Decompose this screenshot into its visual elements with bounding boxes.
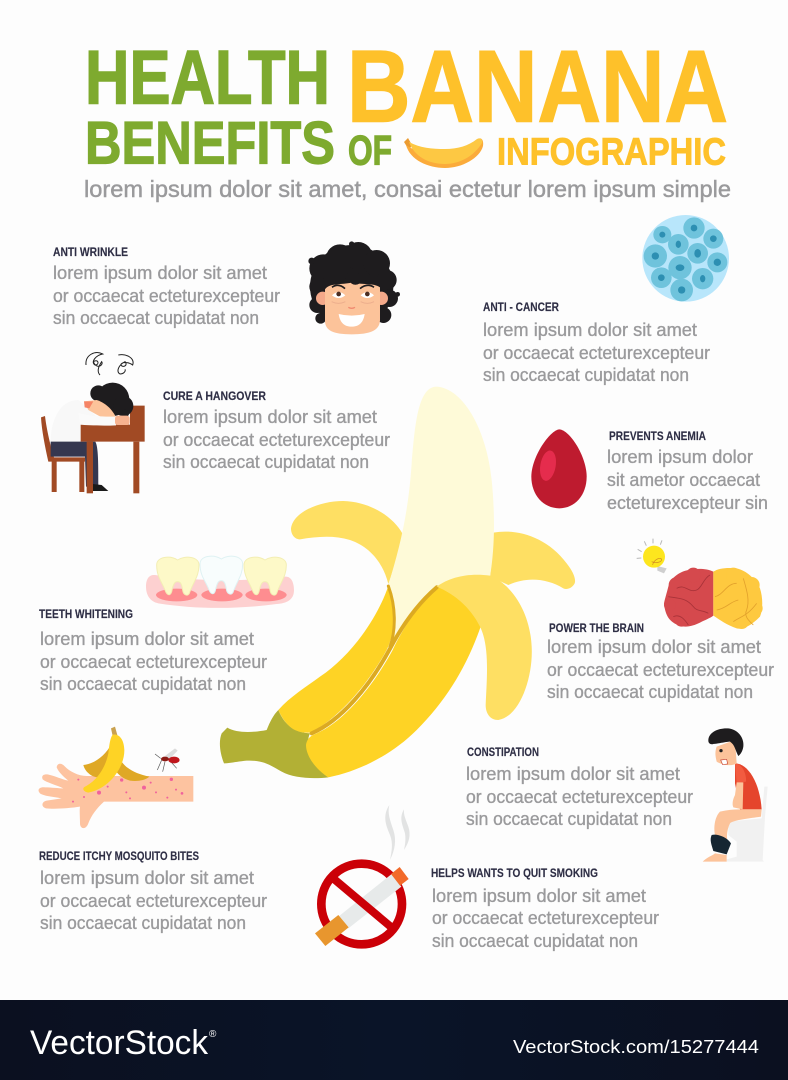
- icon: no smoking sign: [315, 805, 410, 946]
- mouth: [339, 314, 365, 327]
- text block: reduce itchy mosquito bites: lorem ipsum dolor sit amet: [40, 868, 254, 888]
- icon: brain: [664, 568, 763, 629]
- text block: teeth whitening: [39, 607, 267, 694]
- text block: quit smoking: HELPS WANTS TO QUIT SMOKING: [431, 866, 598, 880]
- text block: teeth whitening: or occaecat ecteturexcepteur: [40, 652, 267, 672]
- text block: power the brain: sin occaecat cupidatat non: [547, 682, 753, 702]
- hair: [708, 728, 743, 756]
- text block: cure a hangover: [163, 389, 390, 472]
- icon: teeth: [146, 556, 294, 608]
- footer bar: [0, 1000, 788, 1080]
- icon: hangover person at desk: [41, 353, 145, 493]
- right tooth: [244, 557, 286, 595]
- text block: quit smoking: [431, 866, 659, 951]
- ears: [316, 292, 329, 305]
- footer url: VectorStock.com/15277444: [513, 1037, 759, 1057]
- title: INFOGRAPHIC: [497, 132, 726, 174]
- text block: prevents anemia: sit ametor occaecat: [607, 470, 760, 490]
- text block: power the brain: [547, 621, 774, 702]
- arm: [733, 782, 743, 809]
- banana back right peel: [490, 532, 575, 589]
- hair: [308, 241, 400, 328]
- arm: [39, 764, 193, 828]
- text block: reduce itchy mosquito bites: REDUCE ITCHY MOSQUITO BITES: [39, 849, 199, 863]
- icon: title banana: [404, 138, 483, 168]
- text block: reduce itchy mosquito bites: sin occaecat cupidatat non: [40, 913, 246, 933]
- text block: constipation: lorem ipsum dolor sit amet: [466, 764, 680, 784]
- text block: reduce itchy mosquito bites: [39, 849, 267, 933]
- text block: reduce itchy mosquito bites: or occaecat ecteturexcepteur: [40, 891, 267, 911]
- text block: cure a hangover: lorem ipsum dolor sit amet: [163, 407, 377, 427]
- icon: peeled banana: [220, 387, 575, 778]
- curl: [342, 274, 360, 283]
- peel: [83, 743, 149, 781]
- text block: anti cancer: [483, 300, 710, 385]
- cigarette filter: [315, 915, 349, 946]
- banana front peel: [437, 575, 532, 720]
- text block: anti wrinkle: ANTI WRINKLE: [53, 245, 128, 259]
- desk: [81, 406, 145, 493]
- text block: cure a hangover: CURE A HANGOVER: [163, 389, 266, 403]
- ring: [321, 864, 402, 944]
- bite spots: [72, 778, 183, 803]
- banana pale fruit: [388, 387, 494, 643]
- text block: anti wrinkle: or occaecat ecteturexcepteur: [53, 286, 280, 306]
- cigarette body: [338, 874, 401, 928]
- banana left peel: [291, 501, 403, 584]
- text block: constipation: sin occaecat cupidatat non: [466, 809, 672, 829]
- legs: [714, 809, 762, 840]
- text block: quit smoking: or occaecat ecteturexcepteur: [432, 908, 659, 928]
- shoe: [93, 484, 108, 491]
- text block: constipation: [466, 745, 693, 829]
- smoke: [385, 805, 410, 860]
- icon: person on toilet: [703, 728, 768, 862]
- text block: power the brain: or occaecat ecteturexcepteur: [547, 660, 774, 680]
- banana right skin: [306, 587, 481, 777]
- mosquito: [155, 748, 180, 772]
- face: [715, 740, 737, 765]
- text block: anti cancer: ANTI - CANCER: [483, 300, 559, 314]
- gum: [146, 575, 294, 608]
- text block: anti cancer: lorem ipsum dolor sit amet: [483, 320, 697, 340]
- head hair: [90, 383, 133, 417]
- text block: anti wrinkle: [53, 245, 280, 328]
- shirt: [735, 763, 762, 809]
- left tooth: [157, 557, 199, 595]
- shirt: [51, 400, 97, 442]
- text block: anti cancer: or occaecat ecteturexcepteur: [483, 343, 710, 363]
- text block: teeth whitening: lorem ipsum dolor sit amet: [40, 629, 254, 649]
- banana seam: [312, 586, 437, 733]
- text block: power the brain: POWER THE BRAIN: [549, 621, 644, 635]
- icon: cancer cells: [642, 215, 729, 302]
- text block: anti wrinkle: lorem ipsum dolor sit amet: [53, 263, 267, 283]
- text block: prevents anemia: [607, 429, 768, 513]
- chair: [41, 416, 85, 492]
- title: HEALTH: [85, 36, 330, 120]
- subtitle: lorem ipsum dolor sit amet, consai ectetur lorem ipsum simple: [84, 176, 731, 202]
- title: [85, 30, 728, 176]
- slash: [334, 879, 391, 927]
- face and arm: [84, 400, 116, 417]
- text block: anti cancer: sin occaecat cupidatat non: [483, 365, 689, 385]
- text block: prevents anemia: PREVENTS ANEMIA: [609, 429, 706, 443]
- text block: constipation: or occaecat ecteturexcepteur: [466, 787, 693, 807]
- text block: quit smoking: sin occaecat cupidatat non: [432, 931, 638, 951]
- icon: wrinkled face: [308, 241, 400, 334]
- text block: power the brain: lorem ipsum dolor sit amet: [547, 637, 761, 657]
- title: BANANA: [347, 30, 728, 144]
- text block: constipation: CONSTIPATION: [467, 745, 539, 759]
- text block: prevents anemia: ecteturexcepteur sin: [607, 493, 768, 513]
- cigarette tip: [391, 867, 409, 886]
- footer registered mark: ®: [209, 1029, 217, 1040]
- dizzy swirls: [86, 353, 133, 375]
- icon: blood drop: [531, 429, 587, 508]
- text block: cure a hangover: or occaecat ecteturexcepteur: [163, 430, 390, 450]
- text block: quit smoking: lorem ipsum dolor sit amet: [432, 886, 646, 906]
- text block: teeth whitening: TEETH WHITENING: [39, 607, 133, 621]
- text block: anti wrinkle: sin occaecat cupidatat non: [53, 308, 259, 328]
- banana left skin: [278, 586, 394, 733]
- banana stem: [220, 710, 328, 778]
- title: BENEFITS: [85, 110, 335, 176]
- footer logo: VectorStock: [30, 1024, 209, 1062]
- eyes: [332, 292, 374, 298]
- face: [325, 283, 380, 334]
- trousers: [51, 442, 98, 487]
- middle white tooth: [200, 556, 243, 594]
- text block: cure a hangover: sin occaecat cupidatat non: [163, 452, 369, 472]
- toilet: [727, 787, 768, 862]
- icon: light bulb: [637, 539, 667, 573]
- text block: teeth whitening: sin occaecat cupidatat non: [40, 674, 246, 694]
- icon: arm with peel and mosquito: [39, 727, 193, 828]
- title: OF: [348, 126, 392, 174]
- text block: prevents anemia: lorem ipsum dolor: [607, 447, 753, 467]
